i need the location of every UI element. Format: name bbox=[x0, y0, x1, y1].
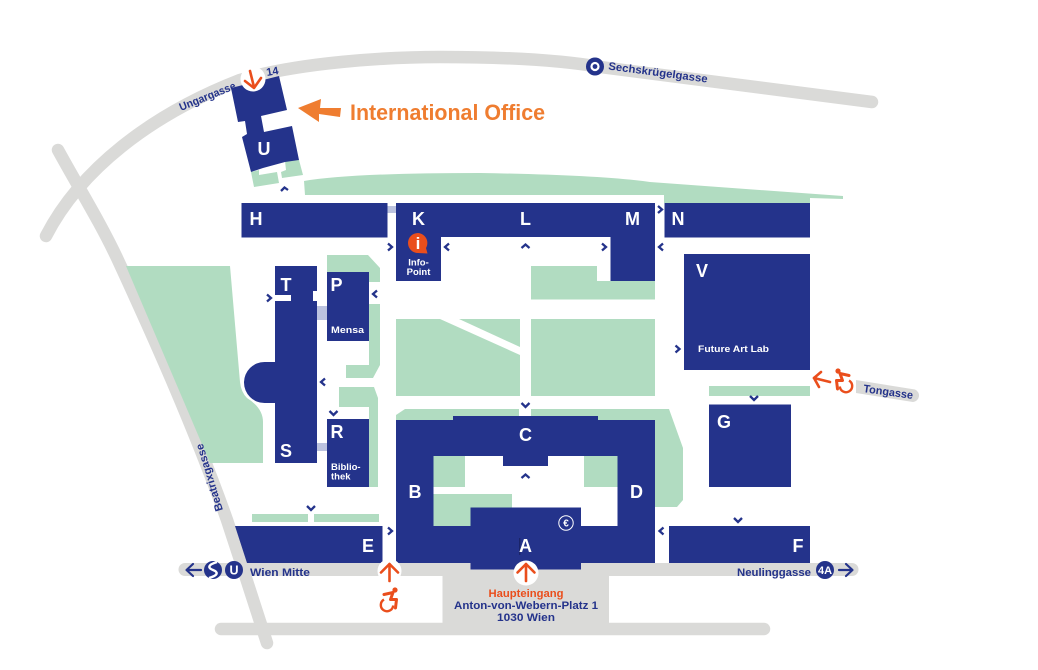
white entrance circles bbox=[240, 66, 538, 586]
building G bbox=[709, 404, 791, 487]
green: strip above G bbox=[709, 386, 810, 396]
chevron right K bbox=[388, 244, 392, 250]
label: International Office: International Office bbox=[350, 100, 545, 125]
chevron left M bbox=[659, 244, 663, 250]
green: around R bbox=[339, 387, 378, 487]
chevron up U bbox=[281, 188, 288, 191]
building F bbox=[669, 526, 810, 563]
green: under building U left bbox=[251, 170, 279, 187]
letter D: D bbox=[630, 482, 643, 502]
navigation chevrons bbox=[267, 188, 758, 534]
label: Wien Mitte: Wien Mitte bbox=[250, 567, 310, 579]
label: Haupteingang: Haupteingang bbox=[488, 588, 564, 600]
chevron left P bbox=[373, 290, 377, 298]
connector S to R bbox=[317, 443, 327, 451]
icon: wheelchair south bbox=[381, 587, 398, 611]
entrance circle main bbox=[514, 560, 538, 586]
caption Info-Point: Point bbox=[407, 267, 431, 278]
green: strip above E left bbox=[252, 514, 308, 522]
thin line beside letter A bbox=[519, 538, 521, 555]
label: house number 14: 14 bbox=[265, 65, 280, 79]
green: around P lower bbox=[346, 304, 380, 378]
chevron down E bbox=[307, 506, 315, 510]
arrow: barrier-free entrance E bbox=[381, 564, 398, 581]
letter T: T bbox=[280, 275, 292, 295]
caption Info-Point: Info- bbox=[408, 258, 429, 268]
letter V: V bbox=[696, 261, 708, 281]
road: Wien Mitte and Neulinggasse bbox=[185, 563, 852, 576]
chevron down G bbox=[750, 396, 758, 400]
letter R: R bbox=[330, 422, 344, 442]
green: courtyard left upper bbox=[433, 456, 465, 487]
caption Future Art Lab: Future Art Lab bbox=[698, 344, 769, 355]
forecourt plaza bbox=[442, 563, 609, 625]
letter M: M bbox=[625, 209, 640, 229]
label: Neulinggasse: Neulinggasse bbox=[737, 567, 811, 579]
arrow: International Office bbox=[298, 99, 341, 122]
label: Tongasse: Tongasse bbox=[863, 383, 914, 402]
chevron right T bbox=[267, 294, 271, 302]
icon: info point: i bbox=[416, 234, 420, 253]
label: Ungargasse: Ungargasse bbox=[178, 80, 238, 114]
label: Sechskrügelgasse: Sechskrügelgasse bbox=[608, 61, 708, 86]
building H bbox=[242, 203, 388, 238]
icon: S-Bahn bbox=[204, 561, 222, 579]
green: under building U right bbox=[281, 160, 303, 178]
building E bbox=[235, 526, 382, 563]
connector walkways bbox=[317, 206, 396, 451]
letter S: S bbox=[280, 441, 292, 461]
arrow: towards Wien Mitte bbox=[186, 564, 201, 576]
caption Bibliothek: thek bbox=[331, 472, 351, 482]
green: around C and D right bbox=[531, 409, 683, 507]
chevron right N bbox=[658, 206, 662, 213]
entrance circle Ungargasse bbox=[240, 66, 266, 92]
building captions bbox=[331, 258, 769, 482]
icon: U-Bahn bbox=[225, 561, 243, 579]
icon: euro ATM bbox=[559, 516, 573, 530]
connector S to P bbox=[317, 306, 327, 320]
buildings A B C D bbox=[396, 416, 655, 570]
letter H: H bbox=[250, 209, 262, 229]
icon: wheelchair Tongasse bbox=[835, 368, 852, 392]
arrow: Tongasse entrance bbox=[814, 372, 830, 387]
green: north strip bbox=[304, 173, 843, 203]
chevron up L bbox=[522, 244, 530, 248]
chevron right V bbox=[676, 346, 680, 352]
building U bbox=[231, 76, 299, 172]
letter B: B bbox=[408, 482, 422, 502]
caption Mensa: Mensa bbox=[331, 325, 365, 336]
arrow: towards Neulinggasse bbox=[839, 564, 852, 576]
letter A: A bbox=[519, 536, 532, 556]
chevron left D bbox=[660, 528, 664, 534]
green: below L bbox=[531, 266, 655, 300]
letter P: P bbox=[330, 275, 343, 295]
road: Ungargasse and Sechskrügelgasse bbox=[46, 57, 872, 236]
chevron right M bbox=[602, 244, 606, 250]
caption Bibliothek: Biblio- bbox=[331, 462, 361, 473]
connector H to K bbox=[387, 206, 396, 213]
green: west lawn bbox=[126, 266, 263, 463]
building P bbox=[327, 272, 369, 341]
chevron down C bbox=[522, 403, 530, 407]
building V bbox=[684, 254, 810, 370]
road: south street bbox=[221, 623, 764, 635]
buildings bbox=[231, 76, 810, 570]
letter L: L bbox=[520, 209, 531, 229]
road: Tongasse bbox=[856, 380, 919, 402]
arrow: main entrance bbox=[518, 564, 534, 581]
building letters bbox=[250, 139, 804, 556]
green: around P top bbox=[327, 255, 380, 282]
icon: info point bbox=[408, 233, 428, 254]
green: courtyard right bbox=[584, 456, 618, 487]
label: Beatrixgasse: Beatrixgasse bbox=[194, 442, 226, 513]
building K L M bbox=[396, 203, 655, 281]
green: centre left upper triangle bbox=[459, 319, 520, 347]
label: postcode: 1030 Wien bbox=[497, 612, 555, 624]
main entrance address bbox=[454, 588, 598, 624]
chevron down R bbox=[330, 411, 338, 415]
letter G: G bbox=[717, 412, 731, 432]
building R bbox=[327, 419, 369, 487]
roads bbox=[46, 57, 919, 643]
green: centre left with path bbox=[396, 319, 520, 396]
green: courtyard left lower bbox=[433, 494, 512, 526]
icon: metro O bbox=[586, 58, 604, 76]
arrow: Ungargasse entrance bbox=[245, 71, 261, 88]
letter N: N bbox=[672, 209, 684, 229]
icon: bus 4A: 4A bbox=[818, 565, 832, 577]
letter K: K bbox=[412, 209, 425, 229]
green: strip above E right bbox=[314, 514, 379, 522]
letter U: U bbox=[258, 139, 270, 159]
icon: euro ATM: € bbox=[563, 518, 569, 530]
chevron down F bbox=[734, 518, 742, 522]
green areas bbox=[126, 160, 843, 526]
icon: bus 4A bbox=[816, 561, 834, 579]
chevron left K bbox=[445, 244, 449, 250]
chevron up courtyard bbox=[522, 474, 530, 478]
green: around C left bbox=[396, 409, 519, 420]
chevron right E bbox=[388, 528, 392, 534]
icon: U-Bahn: U bbox=[229, 564, 239, 578]
letter F: F bbox=[792, 536, 804, 556]
green: centre right bbox=[531, 319, 655, 396]
letter E: E bbox=[362, 536, 374, 556]
building N bbox=[664, 203, 810, 238]
road: Beatrixgasse bbox=[58, 150, 267, 643]
label: street address: Anton-von-Webern-Platz 1 bbox=[454, 600, 598, 612]
letter C: C bbox=[519, 425, 532, 445]
entrance gap E bbox=[382, 563, 396, 576]
building S and T bbox=[244, 266, 317, 463]
entrance circle E bbox=[378, 559, 402, 583]
chevron left S bbox=[321, 378, 325, 386]
